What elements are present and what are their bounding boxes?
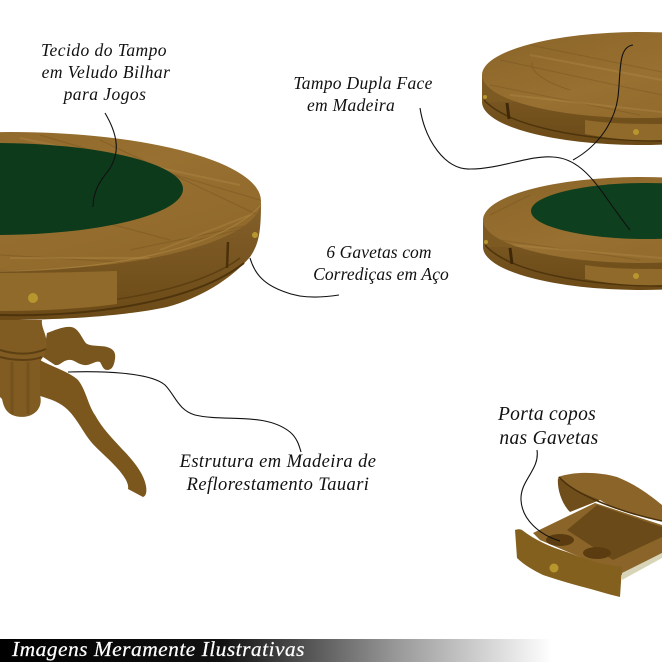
- label: cup holders: Porta copos: [497, 404, 596, 425]
- drawer front: [0, 271, 117, 311]
- label: table felt: para Jogos: [62, 84, 146, 104]
- leader lines: [68, 45, 633, 541]
- label: table felt: em Veludo Bilhar: [42, 62, 170, 82]
- footer gradient bar: [0, 639, 552, 662]
- green felt: [0, 143, 183, 235]
- footer disclaimer: Imagens Meramente Ilustrativas: [11, 637, 305, 661]
- label: cup holders: nas Gavetas: [499, 428, 599, 449]
- label: table felt: Tecido do Tampo: [41, 40, 167, 60]
- label: structure: Reflorestamento Tauari: [186, 475, 369, 495]
- drawer knobs: [28, 293, 38, 303]
- label: drawers: 6 Gavetas com: [326, 242, 432, 262]
- label: drawers: Corrediças em Aço: [313, 264, 449, 284]
- label: structure: Estrutura em Madeira de: [179, 452, 376, 472]
- main table pedestal and legs: [0, 320, 146, 497]
- table top: [0, 132, 261, 270]
- label: double-sided top: em Madeira: [307, 95, 395, 115]
- open drawer with cup holders: [515, 473, 662, 597]
- double-sided top, felt face: [483, 177, 662, 290]
- green felt: [531, 183, 662, 239]
- label: double-sided top: Tampo Dupla Face: [293, 73, 433, 93]
- main table body: [0, 132, 261, 320]
- double-sided top, wood face: [482, 32, 662, 145]
